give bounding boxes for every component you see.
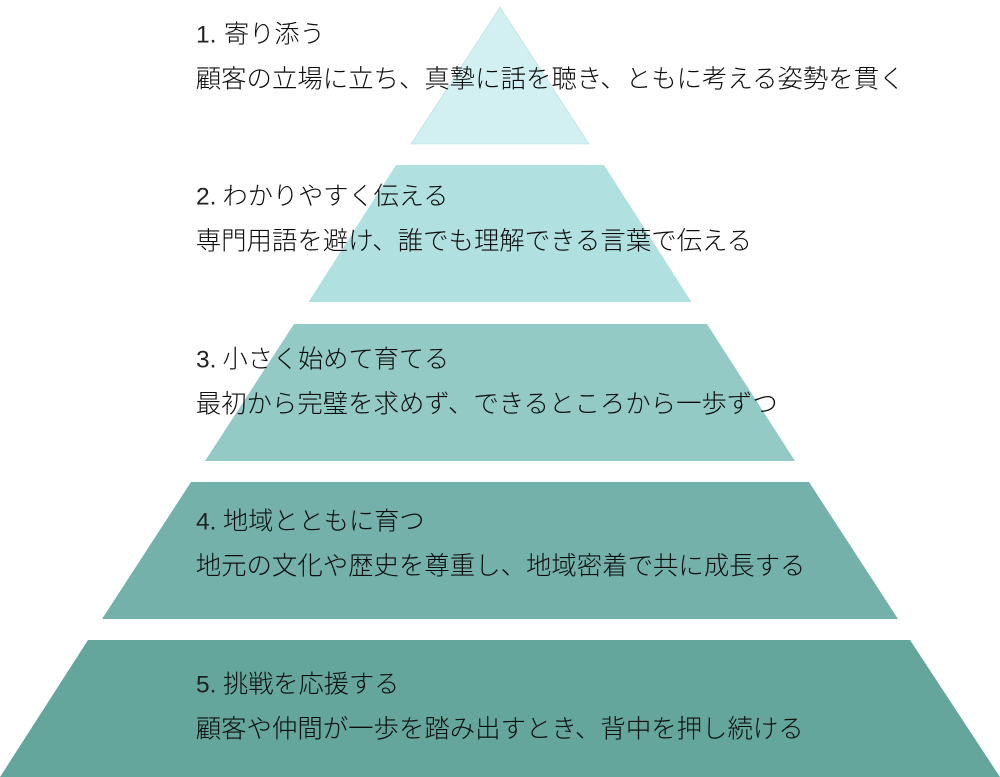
pyramid tier 5 [0, 640, 1000, 777]
item 4 heading: 地域とともに育つ [223, 508, 424, 536]
item 1 heading: 寄り添う [224, 20, 325, 48]
item 5 heading: 5. [196, 672, 216, 698]
item 5 description: 顧客や仲間が一歩を踏み出すとき、背中を押し続ける [196, 716, 804, 744]
item 5 heading: 挑戦を応援する [223, 670, 399, 698]
pyramid tier 4 [102, 482, 898, 619]
item 3 heading: 小さく始めて育てる [222, 346, 449, 374]
item 5 text [196, 670, 804, 744]
pyramid tier 3 [205, 324, 795, 461]
item 1 description: 顧客の立場に立ち、真摯に話を聴き、ともに考える姿勢を貫く [196, 66, 905, 94]
item 2 heading: わかりやすく伝える [222, 182, 448, 210]
item 2 heading: 2. [196, 184, 216, 210]
item 4 description: 地元の文化や歴史を尊重し、地域密着で共に成長する [196, 552, 805, 580]
item 1 text [196, 20, 905, 94]
item 4 heading: 4. [196, 508, 216, 536]
item 1 heading: 1. [196, 22, 216, 48]
item 3 description: 最初から完璧を求めず、できるところから一歩ずつ [196, 390, 778, 418]
item 2 description: 専門用語を避け、誰でも理解できる言葉で伝える [196, 228, 752, 256]
item 2 text [196, 182, 752, 256]
item 3 text [196, 346, 778, 418]
pyramid tier 1 [411, 7, 589, 144]
item 3 heading: 3. [196, 346, 216, 374]
item 4 text [196, 508, 805, 580]
pyramid tier 2 [308, 165, 692, 302]
